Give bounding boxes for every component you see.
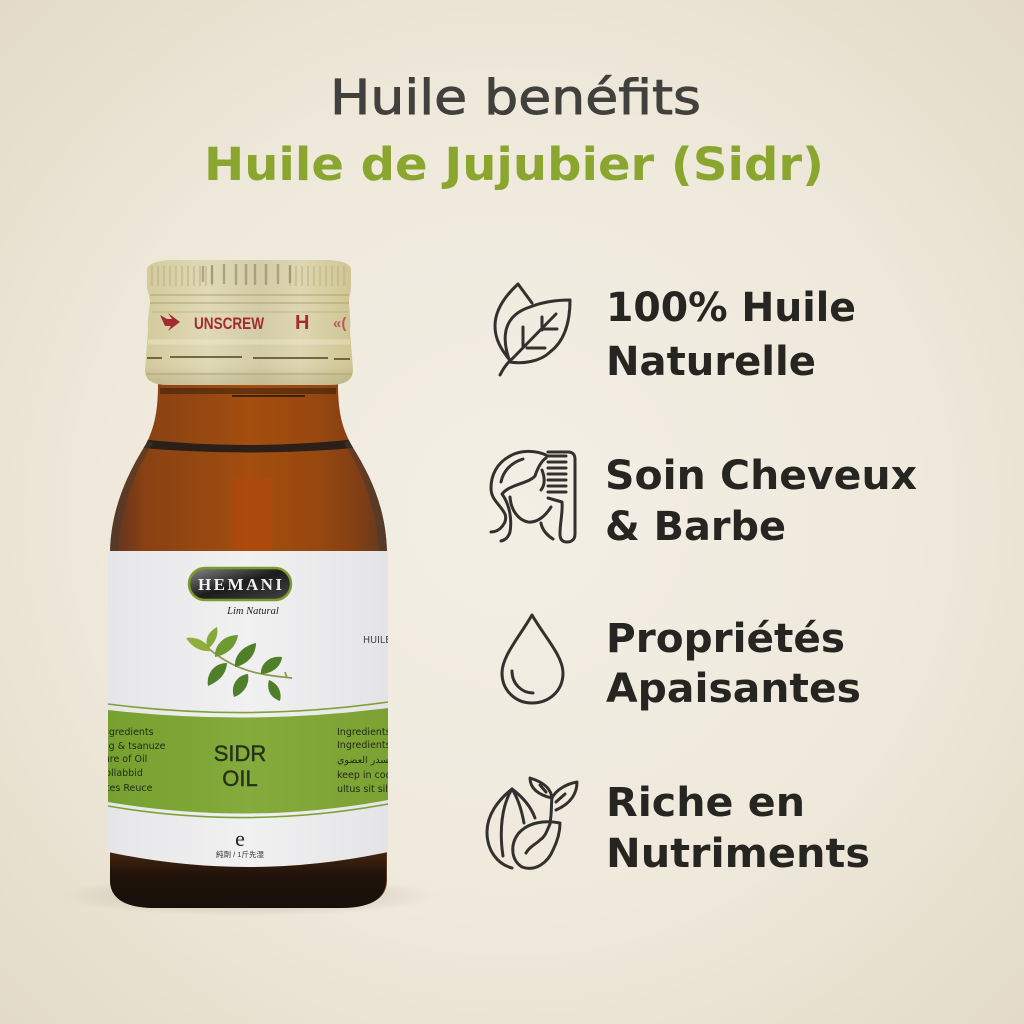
icon: oil drop	[502, 615, 563, 703]
label small print: Ingredients: CIT	[337, 740, 412, 751]
cap knurling	[152, 266, 344, 286]
arrow mark	[160, 313, 180, 331]
icon: hair and comb	[491, 451, 575, 542]
brand logo	[189, 568, 291, 617]
label small print: keep in cool, dry	[337, 770, 416, 781]
net content: 純劑 / 1斤先湿	[216, 849, 264, 859]
label small print: Ingredients: CDI	[337, 727, 414, 738]
benefit: soothing properties	[502, 615, 861, 712]
cap seal	[147, 357, 350, 359]
label	[108, 551, 388, 867]
cap mark: H	[295, 312, 309, 334]
benefit: rich in nutrients	[487, 778, 870, 877]
label small print: Ingredients	[100, 727, 154, 738]
benefit text: 100% Huile	[606, 285, 856, 331]
label small print: ing & tsanuze	[100, 741, 166, 752]
benefit text: Soin Cheveux	[605, 453, 917, 499]
label small print: ates Reuce	[100, 783, 153, 794]
benefit: hair and beard care: & Barbe	[605, 504, 786, 550]
cap grooves	[150, 295, 349, 303]
benefit: natural oil	[495, 284, 856, 385]
band title: OIL	[222, 766, 258, 791]
icon: leaves	[495, 284, 570, 375]
heading: benefits line: Huile benéfits	[330, 70, 701, 126]
bottle glass	[110, 384, 387, 908]
title	[204, 70, 824, 191]
icon: almonds and sprout	[487, 778, 577, 868]
e mark: e	[235, 826, 245, 851]
bottle cap	[145, 260, 353, 385]
label small print: زيت السدر العضوي	[337, 755, 414, 766]
benefit: natural oil: Naturelle	[606, 339, 816, 385]
unscrew text: UNSCREW	[194, 314, 265, 333]
benefit: hair and beard care	[491, 451, 917, 550]
label small print: ultus sit silest, prin	[337, 784, 427, 795]
band title: SIDR	[214, 741, 266, 766]
brand logo: HEMANI	[198, 575, 282, 594]
bottle cap: «(	[333, 315, 346, 332]
brand logo: Lim Natural	[226, 606, 279, 617]
label small print: collabbid	[100, 768, 143, 779]
band title	[214, 741, 266, 791]
bottle base	[110, 850, 386, 908]
label small print: HUILE DE	[363, 635, 408, 646]
leaf branch	[186, 627, 292, 701]
benefit text: Riche en	[606, 780, 805, 826]
oil level and glass shading	[112, 388, 385, 552]
benefit text: Propriétés	[606, 616, 845, 662]
heading: product name: Huile de Jujubier (Sidr)	[204, 138, 824, 191]
benefit: soothing properties: Apaisantes	[606, 666, 861, 712]
bottle shadow	[58, 876, 438, 916]
product bottle	[90, 260, 408, 912]
benefit: rich in nutrients: Nutriments	[606, 831, 870, 877]
green band	[108, 708, 388, 814]
label small print: ture of Oil	[100, 754, 147, 765]
label small print	[108, 636, 388, 792]
